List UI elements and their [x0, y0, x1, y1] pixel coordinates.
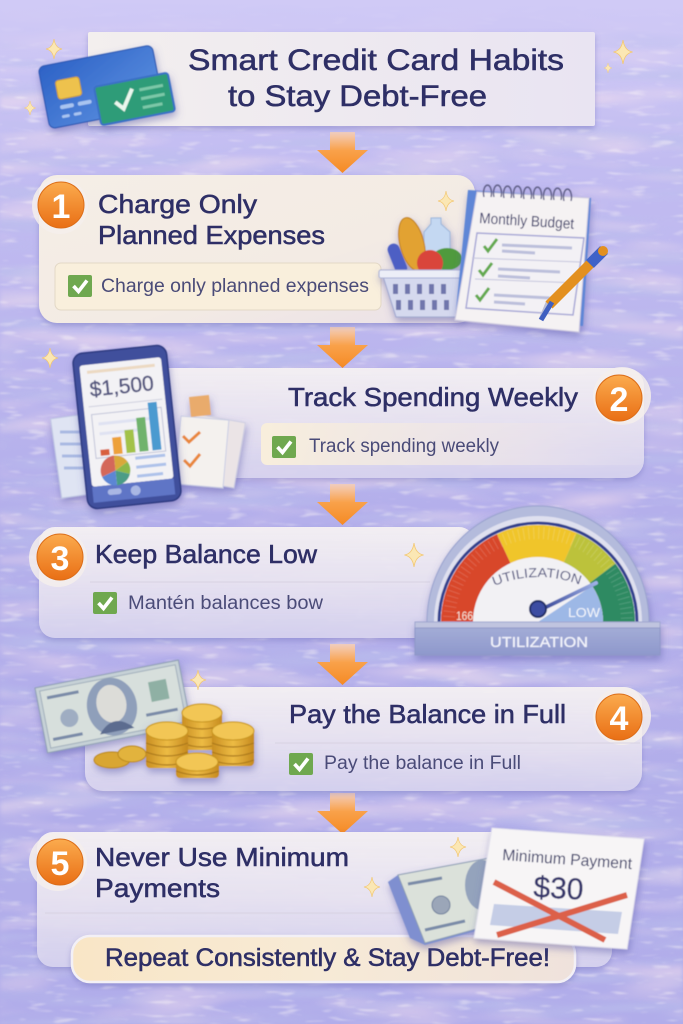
arrow 2: [317, 327, 368, 368]
item 1: [55, 263, 381, 310]
card: minimum payment: $30: [533, 871, 584, 907]
red cross: [494, 882, 627, 940]
heading 4: Pay the Balance in Full: [289, 699, 566, 729]
badge 3: [29, 529, 87, 587]
badge 5: [29, 833, 87, 891]
arrow 4: [317, 644, 368, 685]
sparkles: [364, 837, 466, 897]
title: Smart Credit Card Habits: [188, 44, 564, 77]
gauge: utilization: 166: [456, 609, 473, 623]
heading 1: [98, 189, 325, 250]
item 4: [275, 743, 640, 775]
heading 1: Charge Only: [98, 189, 257, 219]
sparkle: [190, 670, 206, 690]
panel: step 2: [150, 367, 651, 478]
heading 3: Keep Balance Low: [95, 539, 317, 569]
badge 2: 2: [610, 381, 628, 419]
icon: pen: [541, 246, 608, 320]
arrow 3: [317, 484, 368, 525]
icon: monthly budget notebook: Monthly Budget: [479, 210, 575, 233]
badge 1: 1: [52, 188, 70, 226]
callout: repeat consistently: [72, 936, 575, 982]
item 2: Track spending weekly: [309, 436, 499, 457]
panel: title: [88, 32, 595, 126]
icon: smartphone: $1,500: [89, 372, 155, 402]
icon: stack of bills: [388, 858, 499, 945]
badge 4: 4: [610, 700, 629, 738]
badge 1: [32, 178, 88, 234]
sparkle: [404, 543, 424, 567]
badge 4: [593, 687, 651, 745]
icon: gold coins: [94, 704, 254, 778]
heading 5: Payments: [95, 873, 220, 903]
panel: step 3: [29, 527, 475, 638]
item 3: Mantén balances bow: [128, 593, 323, 614]
title: [188, 44, 564, 113]
title: to Stay Debt-Free: [228, 80, 487, 113]
panel: step 4: [85, 687, 651, 791]
badge 5: 5: [51, 845, 69, 883]
item 1: Charge only planned expenses: [101, 276, 369, 297]
heading 2: Track Spending Weekly: [288, 382, 578, 412]
icon: smartphone: [72, 345, 182, 509]
icon: grocery basket: [379, 215, 463, 317]
badge 2: [593, 367, 651, 425]
item 2: [261, 423, 644, 465]
badge 3: 3: [51, 540, 69, 578]
icon: monthly budget notebook: [455, 185, 591, 332]
icon: dollar bills: [35, 660, 191, 753]
gauge: utilization: [412, 504, 666, 664]
icon: receipts: [51, 395, 245, 498]
callout: repeat consistently: Repeat Consistently & Stay Debt-Free!: [105, 944, 550, 972]
sparkles: [24, 39, 633, 368]
sparkle: [438, 191, 454, 211]
item 4: Pay the balance in Full: [324, 753, 521, 774]
card: minimum payment: [474, 828, 644, 949]
heading 1: Planned Expenses: [98, 220, 325, 250]
heading 5: [95, 842, 349, 903]
arrow 1: [317, 132, 368, 173]
gauge base: UTILIZATION: [490, 634, 588, 651]
gauge: utilization: LOW: [568, 605, 601, 620]
panel: step 5: [29, 832, 612, 967]
item 3: [90, 582, 430, 614]
arrow 5: [317, 793, 368, 834]
gauge: utilization: UTILIZATION: [492, 568, 582, 586]
panel: step 1: [32, 175, 475, 323]
icon: credit cards: [38, 45, 175, 129]
gauge base: [415, 622, 660, 655]
card: minimum payment: Minimum Payment: [502, 847, 633, 873]
heading 5: Never Use Minimum: [95, 842, 349, 872]
